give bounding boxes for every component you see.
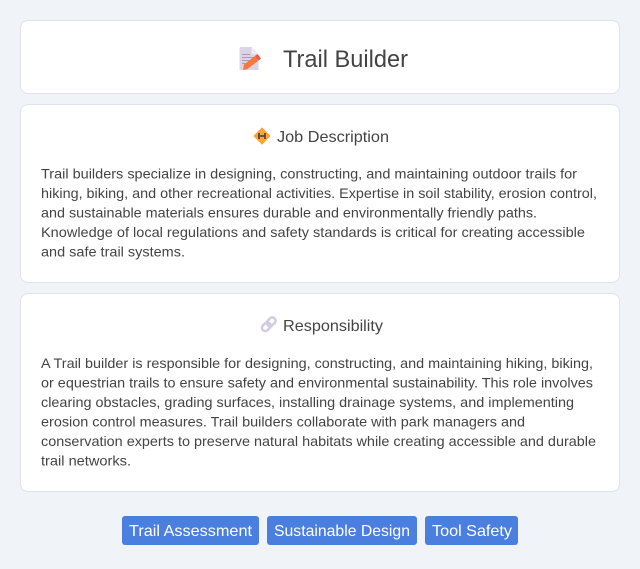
tag: sustainable design: Sustainable Design (274, 523, 410, 540)
text block: job description: and sustainable materials ensures durable and environmentally friendly paths. (41, 204, 537, 220)
panel: title card (20, 20, 620, 94)
icon: document with pencil (240, 47, 261, 70)
panel: job description (20, 104, 620, 282)
text block: responsibility: A Trail builder is responsible for designing, constructing, and maintaining hiking, biking, (41, 355, 593, 371)
text block: responsibility: or equestrian trails to ensure safety and environmental sustainability. This role involves (41, 374, 593, 390)
tag: tool safety (425, 516, 518, 545)
heading: responsibility: Responsibility (283, 318, 383, 335)
icon: chain link (261, 316, 277, 332)
tag: sustainable design (267, 516, 417, 545)
tag: trail assessment: Trail Assessment (129, 523, 253, 540)
text block: responsibility: trail networks. (41, 452, 131, 468)
text block: job description: hiking, biking, and other recreational activities. Expertise in soil stability, erosion control, (41, 185, 597, 201)
text block: responsibility: clearing obstacles, grading surfaces, installing drainage systems, and implementing (41, 394, 574, 410)
text block: responsibility: erosion control measures. Trail builders collaborate with park managers and (41, 414, 525, 430)
tag: trail assessment (122, 516, 259, 545)
text block: job description: Knowledge of local regulations and safety standards is critical for creating accessible (41, 224, 585, 240)
text block: responsibility: conservation experts to preserve natural habitats while creating accessible and durable (41, 433, 596, 449)
text block: job description: and safe trail systems. (41, 244, 185, 260)
title: Trail Builder (283, 46, 408, 73)
icon: construction sign (254, 128, 270, 144)
text block: job description (41, 166, 597, 260)
text block: job description: Trail builders specialize in designing, constructing, and maintaining outdoor trails for (41, 166, 577, 182)
text block: responsibility (41, 355, 596, 468)
heading: job description: Job Description (277, 129, 389, 146)
tag: tool safety: Tool Safety (432, 523, 512, 540)
panel: responsibility (20, 294, 620, 492)
